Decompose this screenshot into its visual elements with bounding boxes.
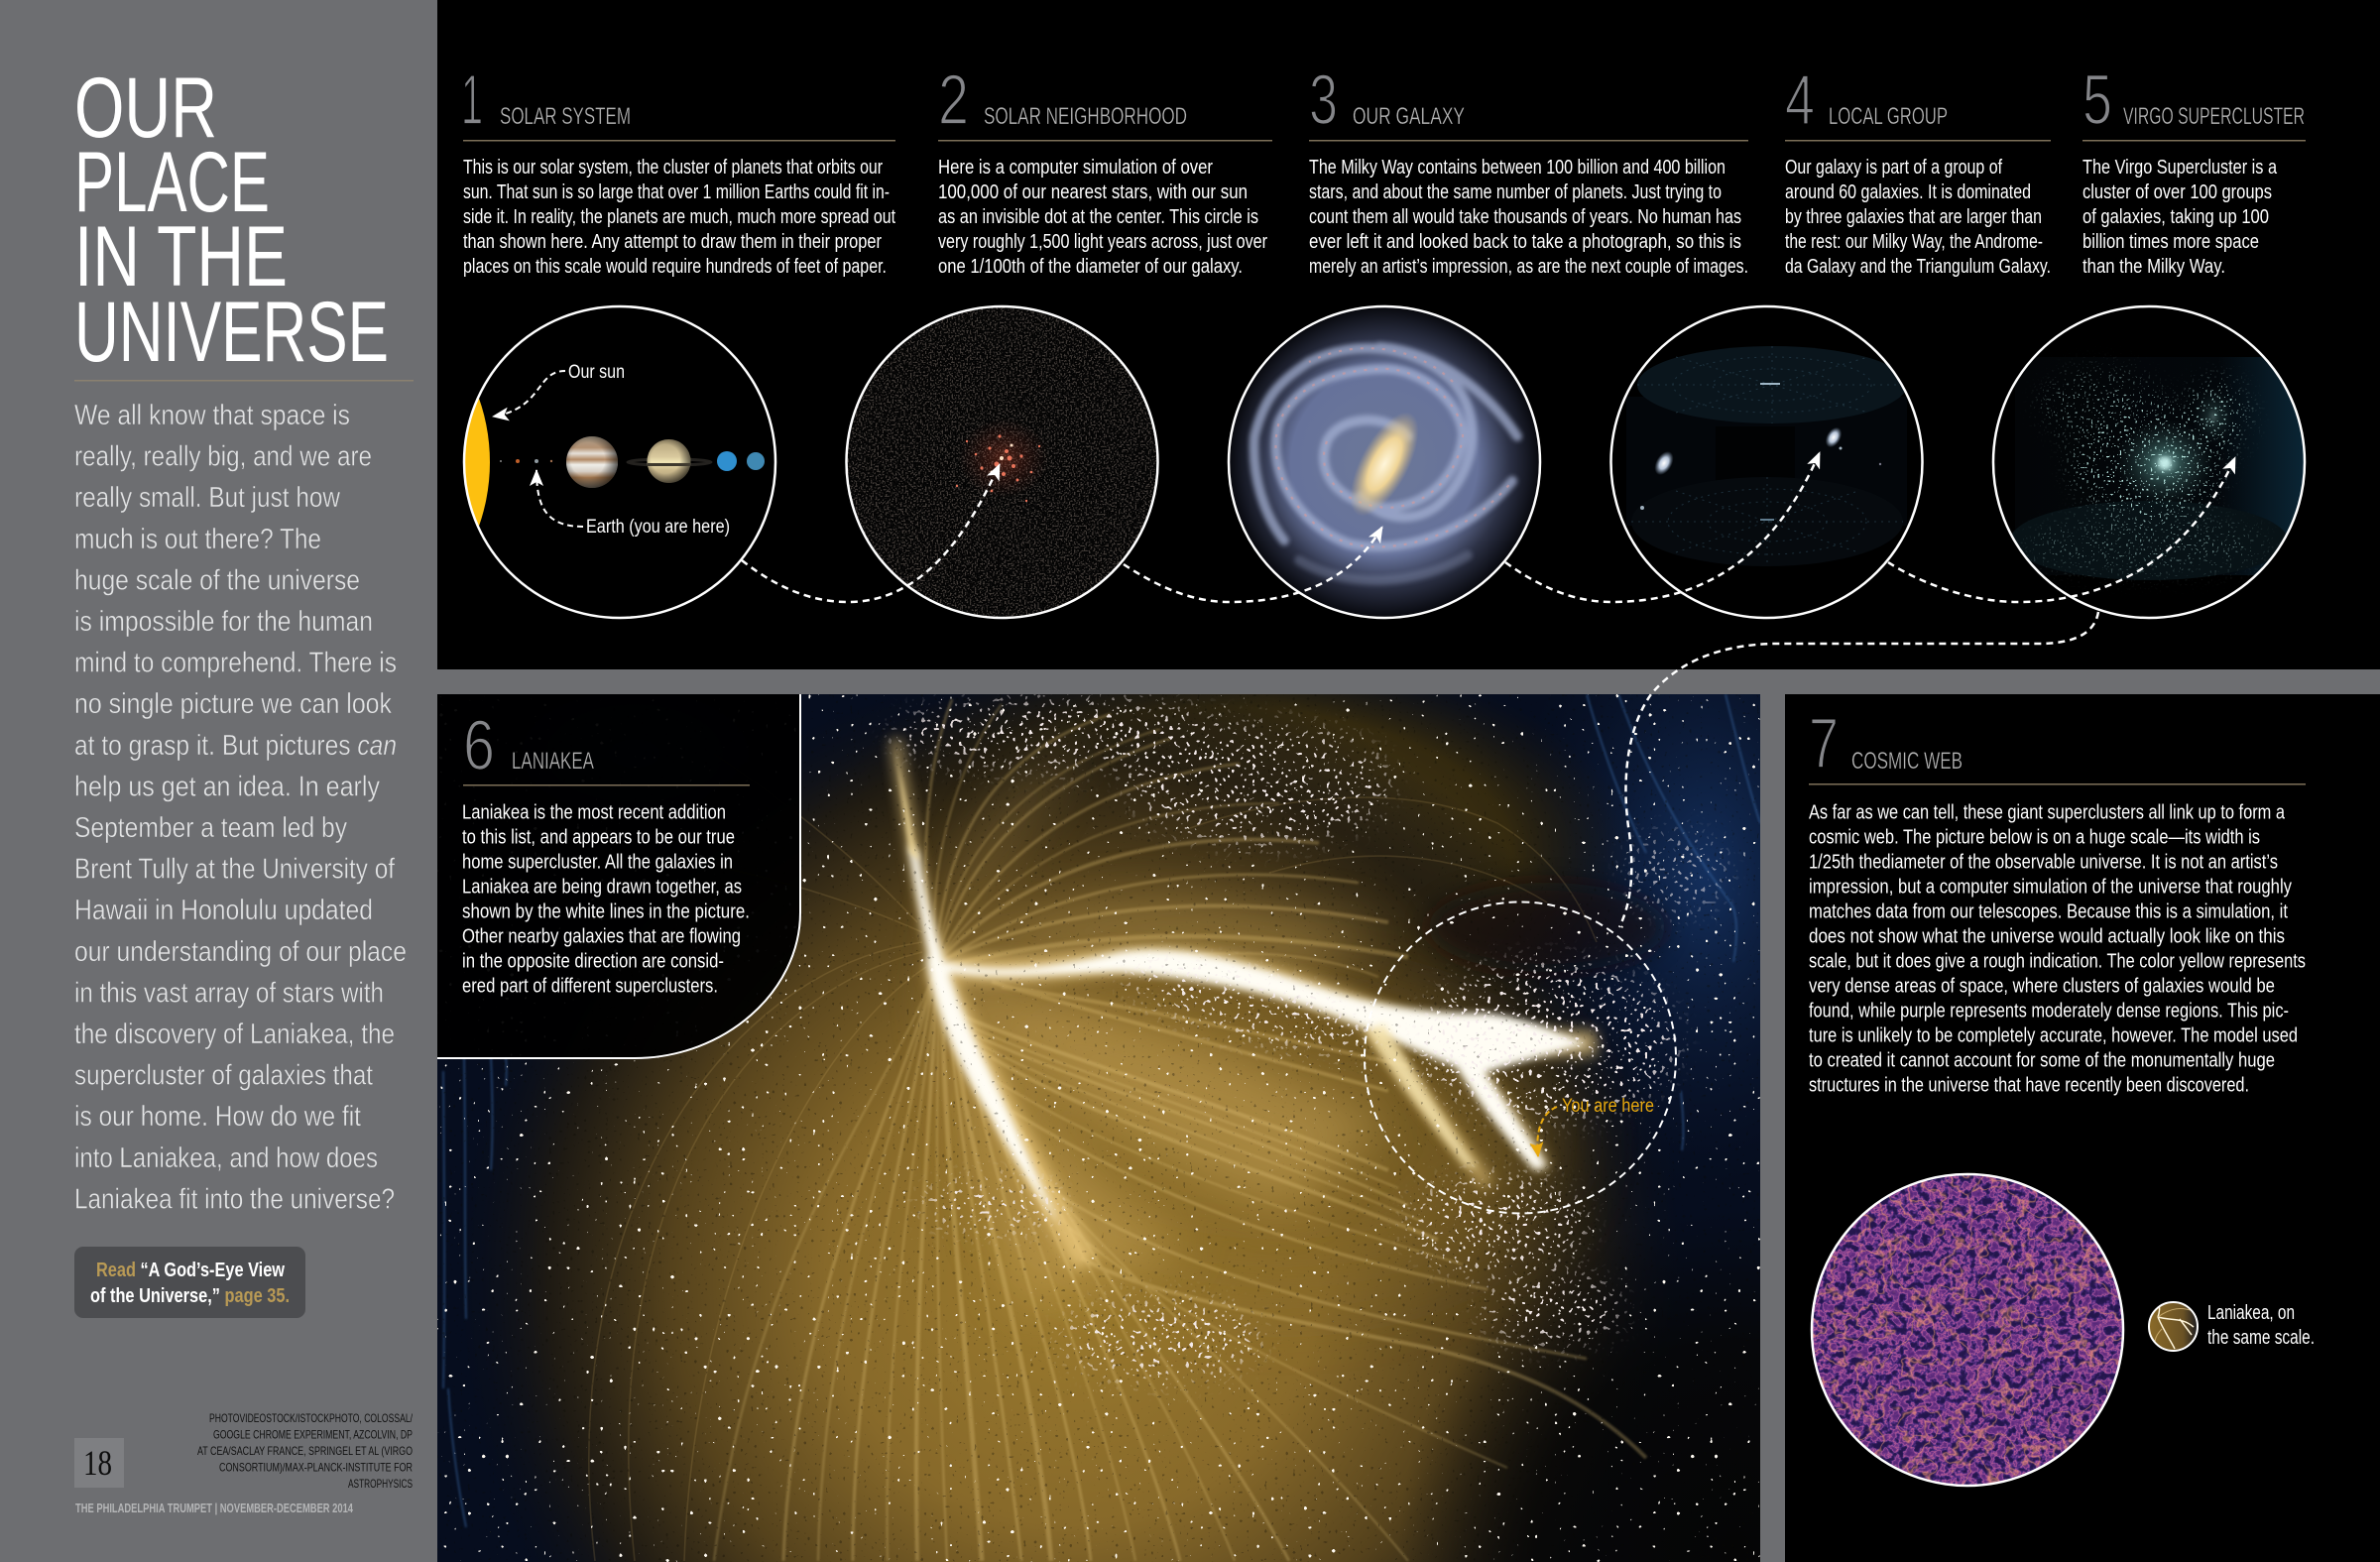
panel: section 6 laniakea text: shown by the white lines in the picture. <box>462 901 750 922</box>
cosmic web description <box>1809 801 2306 1097</box>
photo credits: GOOGLE CHROME EXPERIMENT, AZCOLVIN, DP <box>213 1428 413 1442</box>
label: our sun <box>493 362 625 417</box>
laniakea scale thumbnail <box>2149 1302 2198 1351</box>
upper filament fade <box>894 749 919 861</box>
section 2 text: solar neighborhood: very roughly 1,500 light years across, just over <box>938 231 1267 253</box>
title: OUR <box>74 60 217 156</box>
section 3 text: our galaxy: OUR GALAXY <box>1353 103 1465 130</box>
photo credits: ASTROPHYSICS <box>348 1477 413 1491</box>
bright filaments <box>908 843 1587 1225</box>
circle 2: solar neighborhood star field <box>846 306 1158 619</box>
arrow: virgo to laniakea <box>1619 612 2098 927</box>
thumbnail caption: Laniakea, on <box>2207 1302 2295 1324</box>
circle 4: local group <box>1610 306 1922 618</box>
title: PLACE <box>74 135 270 230</box>
section 1 text: solar system: than shown here. Any attempt to draw them in their proper <box>463 231 882 253</box>
intro paragraph: is impossible for the human <box>74 606 373 638</box>
section 4 text: local group: around 60 galaxies. It is dominated <box>1785 181 2031 203</box>
section 1 text: solar system: SOLAR SYSTEM <box>500 103 631 130</box>
intro paragraph: September a team led by <box>74 812 347 844</box>
intro paragraph: huge scale of the universe <box>74 564 360 596</box>
section 4 text: local group: Our galaxy is part of a group of <box>1785 157 2002 179</box>
page number: 18 <box>83 1443 112 1483</box>
panel: section 6 laniakea text: Other nearby galaxies that are flowing <box>462 926 741 948</box>
section 1 text: solar system <box>461 61 895 278</box>
photo credits <box>197 1411 413 1491</box>
intro paragraph: our understanding of our place <box>74 936 407 968</box>
panel: section 6 laniakea text: ered part of different superclusters. <box>462 976 718 998</box>
cosmic web circle <box>1805 1166 2132 1494</box>
section 4 text: local group: LOCAL GROUP <box>1829 103 1948 130</box>
intro paragraph: really small. But just how <box>74 482 341 514</box>
heading: cosmic web: 7 <box>1809 705 1839 783</box>
blue streaks <box>443 694 1760 1527</box>
title <box>74 60 389 380</box>
section 2 text: solar neighborhood: as an invisible dot at the center. This circle is <box>938 206 1258 228</box>
panel: section 6 laniakea text: Laniakea is the most recent addition <box>462 801 726 823</box>
intro paragraph <box>74 400 407 1215</box>
cosmic web description: very dense areas of space, where clusters of galaxies would be <box>1809 976 2275 998</box>
title: IN THE <box>74 209 288 304</box>
soft bright fans behind flow lines <box>936 734 1388 1309</box>
panel: section 6 laniakea text: in the opposite direction are consid- <box>462 950 724 972</box>
intro paragraph: We all know that space is <box>74 400 350 431</box>
section 1 text: solar system: This is our solar system, the cluster of planets that orbits our <box>463 157 883 179</box>
page number <box>74 1438 124 1488</box>
cosmic web description: 1/25th thediameter of the observable universe. It is not an artist’s <box>1809 851 2278 873</box>
section 5 text: virgo supercluster: The Virgo Supercluster is a <box>2082 157 2278 179</box>
section 4 text: local group: the rest: our Milky Way, the Androme- <box>1785 231 2043 253</box>
cosmic web description: As far as we can tell, these giant superclusters all link up to form a <box>1809 801 2286 823</box>
section 2 text: solar neighborhood <box>938 61 1272 278</box>
photo credits: AT CEA/SACLAY FRANCE, SPRINGEL ET AL (VIRGO <box>197 1444 413 1458</box>
title: UNIVERSE <box>74 285 389 380</box>
section 1 text: solar system: side it. In reality, the planets are much, much more spread out <box>463 206 895 228</box>
panel: laniakea image <box>437 694 1760 1562</box>
lower left branch <box>1367 1023 1478 1168</box>
glow around filaments <box>895 739 1597 1264</box>
panel: section 7 cosmic web <box>1785 694 2380 1562</box>
heading: cosmic web: COSMIC WEB <box>1851 748 1963 775</box>
thumbnail caption: the same scale. <box>2207 1327 2315 1349</box>
thumbnail caption <box>2207 1302 2315 1349</box>
section 3 text: our galaxy: count them all would take thousands of years. No human has <box>1309 206 1741 228</box>
intro paragraph: no single picture we can look <box>74 688 392 720</box>
footer: THE PHILADELPHIA TRUMPET | NOVEMBER-DECEMBER 2014 <box>75 1502 353 1515</box>
callout: read article: Read “A God’s-Eye View <box>96 1260 285 1281</box>
circle 5: virgo supercluster <box>1993 306 2306 619</box>
intro paragraph: help us get an idea. In early <box>74 771 380 802</box>
label: our sun: Our sun <box>568 362 625 383</box>
intro paragraph: is our home. How do we fit <box>74 1101 361 1133</box>
arrow: local group to virgo <box>1888 457 2235 602</box>
section 2 text: solar neighborhood: one 1/100th of the diameter of our galaxy. <box>938 256 1243 278</box>
intro paragraph: in this vast array of stars with <box>74 977 384 1009</box>
section 4 text: local group: by three galaxies that are larger than <box>1785 206 2042 228</box>
star speckle <box>437 694 1760 1562</box>
section 1 text: solar system: 1 <box>461 61 483 140</box>
intro paragraph: much is out there? The <box>74 524 321 555</box>
section 3 text: our galaxy: stars, and about the same number of planets. Just trying to <box>1309 181 1722 203</box>
panel: section 6 laniakea text: to this list, and appears to be our true <box>462 827 735 849</box>
section 2 text: solar neighborhood: 2 <box>938 61 969 140</box>
arrow: solar system to neighborhood <box>742 464 1000 602</box>
cosmic web description: structures in the universe that have recently been discovered. <box>1809 1075 2249 1097</box>
panel: section 6 laniakea text <box>437 694 800 1058</box>
arrow: galaxy to local group <box>1505 452 1820 602</box>
section 5 text: virgo supercluster: cluster of over 100 groups <box>2082 181 2272 203</box>
dashed circle: laniakea position <box>1365 902 1676 1214</box>
cosmic web description: matches data from our telescopes. Because this is a simulation, it <box>1809 901 2288 922</box>
intro paragraph: the discovery of Laniakea, the <box>74 1019 395 1050</box>
intro paragraph: at to grasp it. But pictures can <box>74 730 397 762</box>
section 5 text: virgo supercluster <box>2082 61 2306 278</box>
section 3 text: our galaxy: 3 <box>1309 61 1338 140</box>
section 1 text: solar system: sun. That sun is so large that over 1 million Earths could fit in- <box>463 181 890 203</box>
section 5 text: virgo supercluster: than the Milky Way. <box>2082 256 2225 278</box>
section 3 text: our galaxy: merely an artist’s impression, as are the next couple of images. <box>1309 256 1748 278</box>
photo credits: CONSORTIUM)/MAX-PLANCK-INSTITUTE FOR <box>219 1460 413 1474</box>
cosmic web description: to created it cannot account for some of the monumentally huge <box>1809 1049 2275 1071</box>
flow lines: upper fan <box>926 699 1408 1091</box>
section 3 text: our galaxy: The Milky Way contains between 100 billion and 400 billion <box>1309 157 1726 179</box>
callout: read article <box>74 1247 305 1318</box>
section 3 text: our galaxy: ever left it and looked back to take a photograph, so this is <box>1309 231 1741 253</box>
section 2 text: solar neighborhood: SOLAR NEIGHBORHOOD <box>984 103 1187 130</box>
section 2 text: solar neighborhood: Here is a computer simulation of over <box>938 157 1213 179</box>
cosmic web description: cosmic web. The picture below is on a huge scale—its width is <box>1809 827 2260 849</box>
panel: scale sequence 1 to 5 <box>437 0 2380 669</box>
photo credits: PHOTOVIDEOSTOCK/ISTOCKPHOTO, COLOSSAL/ <box>209 1411 413 1425</box>
intro paragraph: supercluster of galaxies that <box>74 1060 373 1092</box>
circle 1: solar system illustration <box>462 305 777 619</box>
section 5 text: virgo supercluster: of galaxies, taking up 100 <box>2082 206 2269 228</box>
circle 3: milky way galaxy <box>1229 306 1540 618</box>
heading: cosmic web <box>1809 705 2306 785</box>
cosmic web description: found, while purple represents moderately dense regions. This pic- <box>1809 1000 2289 1021</box>
label: earth: Earth (you are here) <box>586 517 730 538</box>
panel: section 6 laniakea text: home supercluster. All the galaxies in <box>462 851 733 873</box>
section 3 text: our galaxy <box>1309 61 1748 278</box>
intro paragraph: mind to comprehend. There is <box>74 648 397 679</box>
intro paragraph: into Laniakea, and how does <box>74 1142 378 1174</box>
section 4 text: local group: 4 <box>1785 61 1815 140</box>
cosmic web description: does not show what the universe would actually look like on this <box>1809 926 2285 948</box>
panel: section 6 laniakea text: Laniakea are being drawn together, as <box>462 877 742 899</box>
section 2 text: solar neighborhood: 100,000 of our nearest stars, with our sun <box>938 181 1248 203</box>
arrow: neighborhood to galaxy <box>1124 527 1382 602</box>
flow lines: far arcs <box>589 754 1597 1561</box>
intro paragraph: Hawaii in Honolulu updated <box>74 895 373 926</box>
callout: read article: of the Universe,” page 35. <box>90 1285 290 1307</box>
section 4 text: local group <box>1785 61 2051 278</box>
flow lines: lower fan <box>714 967 1646 1561</box>
intro paragraph: really, really big, and we are <box>74 441 372 473</box>
label: you are here: You are here <box>1562 1096 1654 1117</box>
section 4 text: local group: da Galaxy and the Triangulum Galaxy. <box>1785 256 2051 278</box>
intro paragraph: Laniakea fit into the universe? <box>74 1183 395 1215</box>
cosmic web description: impression, but a computer simulation of the universe that roughly <box>1809 877 2292 899</box>
label: you are here <box>1537 1096 1654 1156</box>
label: earth <box>536 470 730 538</box>
panel: section 6 laniakea text: 6 <box>463 707 495 785</box>
section 1 text: solar system: places on this scale would require hundreds of feet of paper. <box>463 256 887 278</box>
intro paragraph: Brent Tully at the University of <box>74 854 396 886</box>
section 5 text: virgo supercluster: billion times more space <box>2082 231 2259 253</box>
panel: section 6 laniakea text: LANIAKEA <box>512 748 594 775</box>
section 5 text: virgo supercluster: 5 <box>2082 61 2112 140</box>
